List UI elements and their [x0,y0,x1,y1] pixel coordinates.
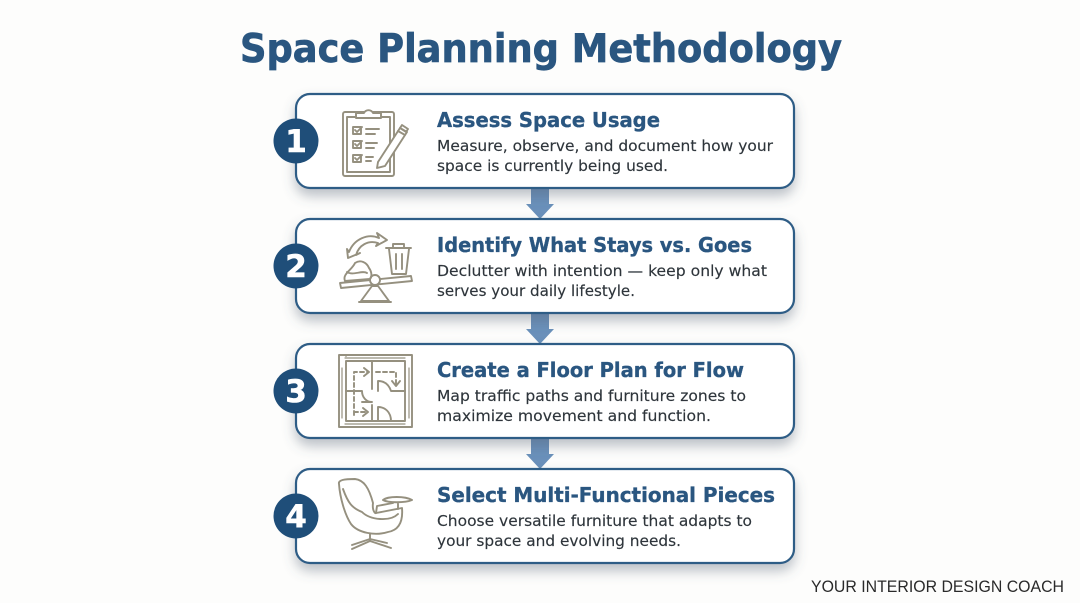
description 2: Declutter with intention — keep only what [437,262,767,280]
arrow: step 3 to 4 [526,437,554,469]
icon: clipboard checklist [343,110,408,176]
arrow: step 2 to 3 [526,312,554,344]
description 2: serves your daily lifestyle. [437,282,635,300]
badge 2 [274,244,318,288]
description 3: maximize movement and function. [437,407,711,425]
icon: lounge chair with side table [339,479,412,549]
description 2 [437,262,767,300]
panel: step 2 [274,219,794,313]
description 1: Measure, observe, and document how your [437,137,774,155]
badge 4 [274,494,318,538]
icon: balance with trash can [340,233,412,302]
heading 4: Select Multi-Functional Pieces [437,483,775,507]
badge 4: 4 [285,499,307,535]
heading 1: Assess Space Usage [437,108,660,132]
panel: step 4 [274,469,794,563]
description 3 [437,387,746,425]
badge 3 [274,368,318,414]
description 1: space is currently being used. [437,157,668,175]
badge 3: 3 [285,374,307,410]
description 3: Map traffic paths and furniture zones to [437,387,746,405]
badge 2: 2 [285,249,307,285]
description 4: Choose versatile furniture that adapts to [437,512,752,530]
title: Space Planning Methodology [240,27,842,72]
badge 1: 1 [285,124,307,160]
panel: step 3 [274,344,794,438]
watermark: YOUR INTERIOR DESIGN COACH [811,577,1064,596]
badge 1 [274,118,318,164]
panel: step 1 [274,94,794,188]
description 4 [437,512,752,550]
description 4: your space and evolving needs. [437,532,681,550]
arrow: step 1 to 2 [526,187,554,219]
heading 2: Identify What Stays vs. Goes [437,233,752,257]
icon: floor plan [339,355,412,427]
heading 3: Create a Floor Plan for Flow [437,358,744,382]
description 1 [437,137,774,175]
